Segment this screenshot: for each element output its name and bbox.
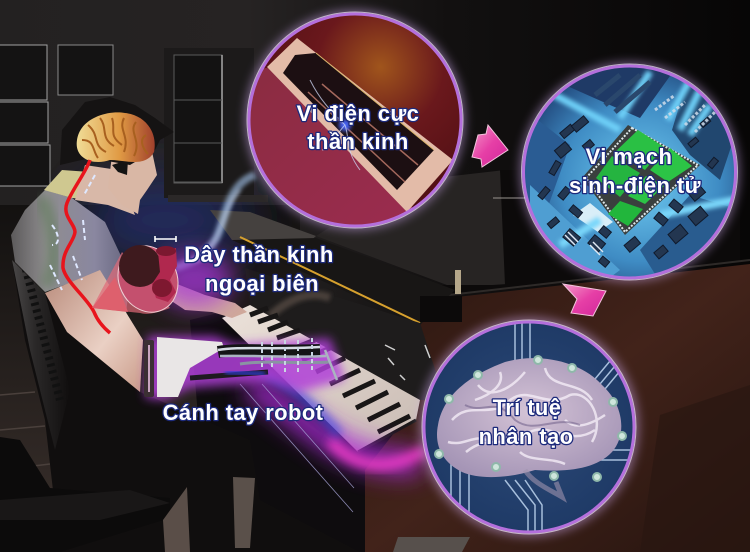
prosthetic socket bbox=[157, 337, 224, 397]
nodes bbox=[435, 356, 626, 481]
label: bio-electronic chip line 2: sinh-điện tử bbox=[569, 173, 701, 198]
circle: artificial intelligence bbox=[419, 317, 640, 537]
label: neural microelectrode line 2: thần kinh bbox=[307, 129, 409, 154]
components bbox=[538, 75, 719, 267]
peripheral nerve bbox=[63, 160, 110, 333]
music notes glints bbox=[385, 345, 430, 380]
back and trousers bbox=[12, 260, 360, 552]
scale bar bbox=[155, 236, 176, 242]
label: peripheral nerve line 2: ngoại biên bbox=[205, 271, 319, 296]
robot arm bbox=[144, 336, 345, 400]
green cells bbox=[615, 130, 664, 170]
window: centre bbox=[164, 48, 268, 202]
purple glow under keyboard bbox=[240, 372, 425, 512]
label: neural microelectrode: Vi điện cực bbox=[297, 101, 419, 126]
red wedge bbox=[92, 277, 128, 312]
electrode tube bbox=[267, 38, 453, 212]
hair bbox=[60, 97, 174, 165]
arrow: chip to AI bbox=[563, 284, 606, 316]
sound wave wisp bbox=[175, 175, 255, 268]
piano music desk and lid bbox=[190, 170, 750, 552]
grand piano wood body bbox=[363, 264, 750, 552]
floor between legs bbox=[163, 487, 190, 552]
nerve cross-section inset bbox=[92, 236, 189, 322]
circuit traces bbox=[451, 322, 640, 535]
upper arm and forearm bbox=[45, 270, 143, 392]
shirt bbox=[11, 190, 130, 325]
purple glow behind nerve inset bbox=[157, 252, 233, 308]
mechanical fingers bbox=[218, 350, 320, 352]
brain bbox=[77, 112, 155, 162]
pianist bbox=[0, 97, 360, 552]
connector line bbox=[493, 197, 526, 199]
arrow: microelectrode to chip bbox=[472, 125, 508, 167]
label: artificial intelligence line 2: nhân tạo bbox=[479, 424, 573, 449]
label: bio-electronic chip: Vi mạch bbox=[586, 144, 672, 169]
piano bench bbox=[0, 437, 170, 552]
window: left bbox=[0, 45, 113, 186]
chip package bbox=[582, 125, 700, 235]
keyboard bbox=[222, 305, 420, 452]
circle: bio-electronic chip bbox=[520, 62, 740, 285]
signal arrows bbox=[50, 175, 95, 290]
label: artificial intelligence: Trí tuệ bbox=[493, 395, 561, 420]
far arm to keys bbox=[170, 282, 247, 318]
neck shoulder bbox=[44, 170, 95, 200]
label: peripheral nerve: Dây thần kinh bbox=[184, 242, 334, 267]
face bbox=[108, 142, 157, 214]
dark board sections bbox=[569, 68, 670, 118]
bright traces bbox=[545, 72, 710, 135]
brain bbox=[437, 358, 621, 477]
label: robot arm: Cánh tay robot bbox=[163, 400, 324, 425]
circle: neural microelectrode bbox=[230, 10, 465, 240]
